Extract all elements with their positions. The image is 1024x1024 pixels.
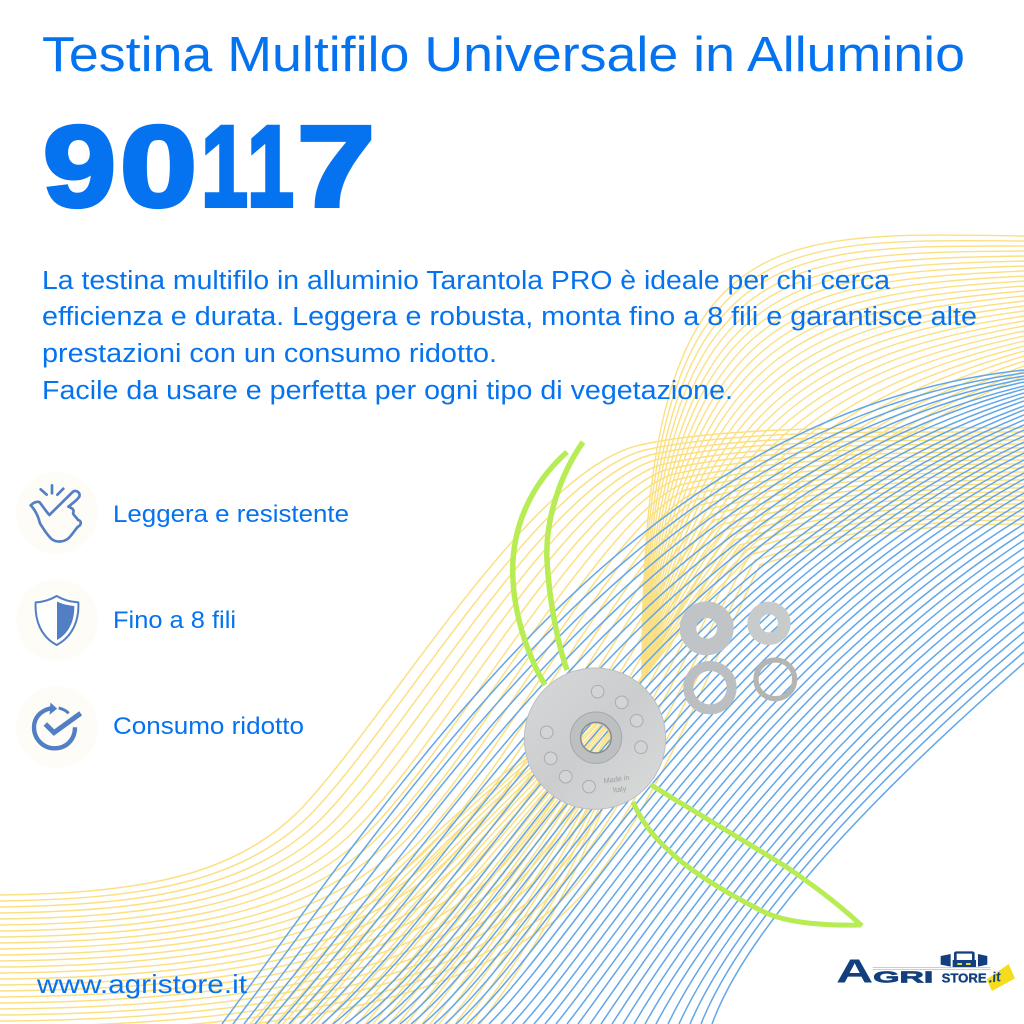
background: yellow wave lines upper right (250, 235, 1024, 1024)
logo: Agri Store.it: STORE (942, 971, 987, 986)
washers (688, 608, 795, 709)
logo tractor (941, 951, 987, 967)
product code: 9 (43, 103, 116, 231)
logo: Agri Store.it: A (836, 954, 873, 991)
green trimmer lines (513, 442, 862, 926)
product code: 0 (120, 103, 197, 231)
feature: light and resistant: Leggera e resistente (113, 501, 349, 528)
feature: up to 8 lines: Fino a 8 fili (113, 607, 236, 634)
aluminium disc: Italy (612, 784, 627, 795)
description text (42, 267, 977, 405)
aluminium disc: Made in (603, 773, 630, 785)
product code: 7 (297, 103, 375, 231)
product code: 1 (201, 103, 248, 231)
aluminium disc (524, 668, 666, 809)
background: yellow wave lines lower left (0, 428, 1024, 1024)
product code: 1 (247, 103, 294, 231)
logo: Agri Store.it (836, 951, 1015, 991)
feature: reduced consumption (16, 686, 304, 768)
description text: La testina multifilo in alluminio Tarantola PRO è ideale per chi cerca (42, 267, 891, 295)
title: Testina Multifilo Universale in Alluminio (42, 28, 965, 82)
feature: up to 8 lines (16, 579, 236, 661)
website url: www.agristore.it (36, 969, 248, 999)
feature: reduced consumption: Consumo ridotto (113, 713, 304, 740)
logo: Agri Store.it: GRI (873, 970, 933, 987)
icon: pointing hand (31, 485, 81, 542)
feature: light and resistant (16, 472, 349, 554)
background: blue wave lines (222, 370, 1024, 1024)
icon: shield (36, 596, 78, 645)
product photo: trimmer head (513, 442, 862, 926)
logo: Agri Store.it: .it (987, 968, 1003, 986)
description text: Facile da usare e perfetta per ogni tipo di vegetazione. (42, 377, 733, 405)
icon: circular check (34, 703, 81, 748)
description text: efficienza e durata. Leggera e robusta, monta fino a 8 fili e garantisce alte (42, 303, 977, 331)
description text: prestazioni con un consumo ridotto. (42, 340, 497, 368)
